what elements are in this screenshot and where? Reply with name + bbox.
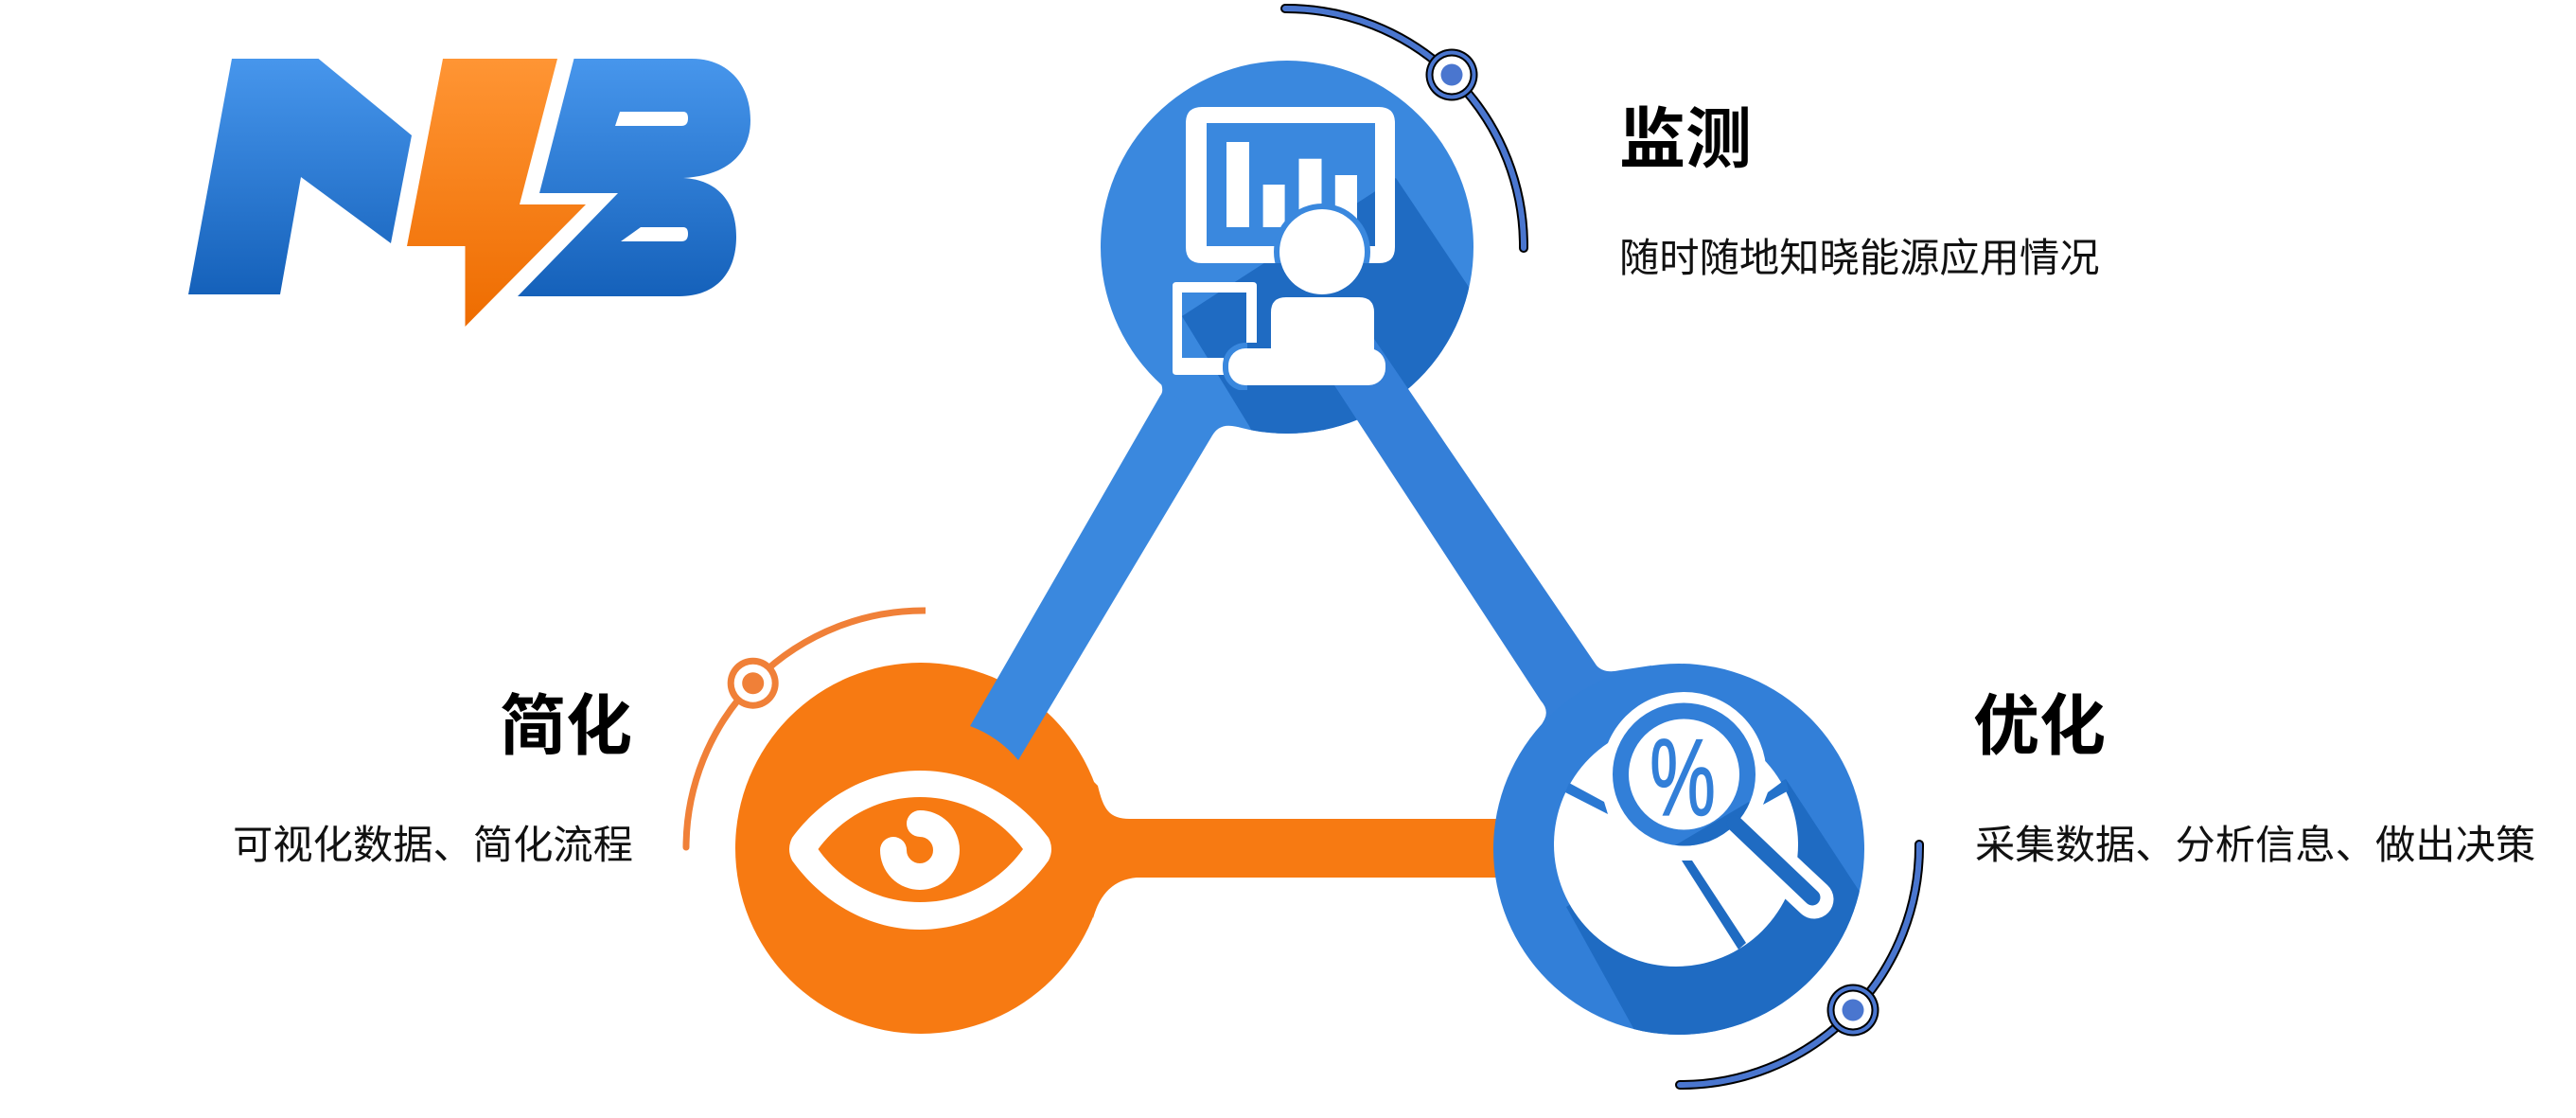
logo letter B (518, 59, 750, 296)
strokes on disc (1565, 783, 1608, 814)
head (1279, 209, 1365, 294)
node: monitor (blue) (970, 61, 1486, 760)
icon: eye (789, 771, 1051, 930)
magnifier ring (1620, 711, 1747, 838)
heading: optimize: 优化 (1973, 689, 2106, 763)
text: monitor description: 随时随地知晓能源应用情况 (1619, 236, 2100, 280)
percent sign: % (1650, 717, 1716, 839)
orange connector bar (1088, 776, 1505, 918)
logo letter N (188, 59, 412, 294)
long shadow (1566, 780, 1860, 1035)
desk base ring (1223, 343, 1247, 390)
arc marker: simplify (683, 611, 926, 850)
node: optimize (blue) (1493, 664, 1864, 1035)
tablet (1173, 282, 1257, 375)
text: simplify description: 可视化数据、简化流程 (233, 823, 633, 867)
heading: monitor: 监测 (1619, 102, 1752, 176)
arc marker: optimize (1680, 844, 1919, 1085)
bar chart (1226, 142, 1357, 227)
magnifier handle (1735, 824, 1812, 897)
white disc (1554, 722, 1798, 967)
screen frame (1186, 107, 1395, 263)
icon: magnifier with percent (1554, 692, 1814, 967)
logo (188, 59, 750, 327)
desk base (1228, 348, 1385, 385)
body (1271, 297, 1374, 350)
arc marker: monitor (1285, 9, 1524, 248)
left blue connector (970, 360, 1268, 760)
right blue connector (1334, 339, 1651, 748)
orange circle (735, 663, 1106, 1034)
monitor circle (1101, 61, 1473, 434)
heading: simplify: 简化 (500, 689, 632, 763)
long shadow (1182, 178, 1486, 445)
optimize circle (1493, 664, 1864, 1035)
magnifier halo (1601, 692, 1766, 857)
text: optimize description: 采集数据、分析信息、做出决策 (1975, 823, 2535, 867)
head ring (1274, 204, 1370, 263)
node: simplify (orange) (735, 663, 1505, 1034)
logo lightning bolt (407, 59, 586, 327)
icon: monitoring person (1173, 107, 1395, 391)
